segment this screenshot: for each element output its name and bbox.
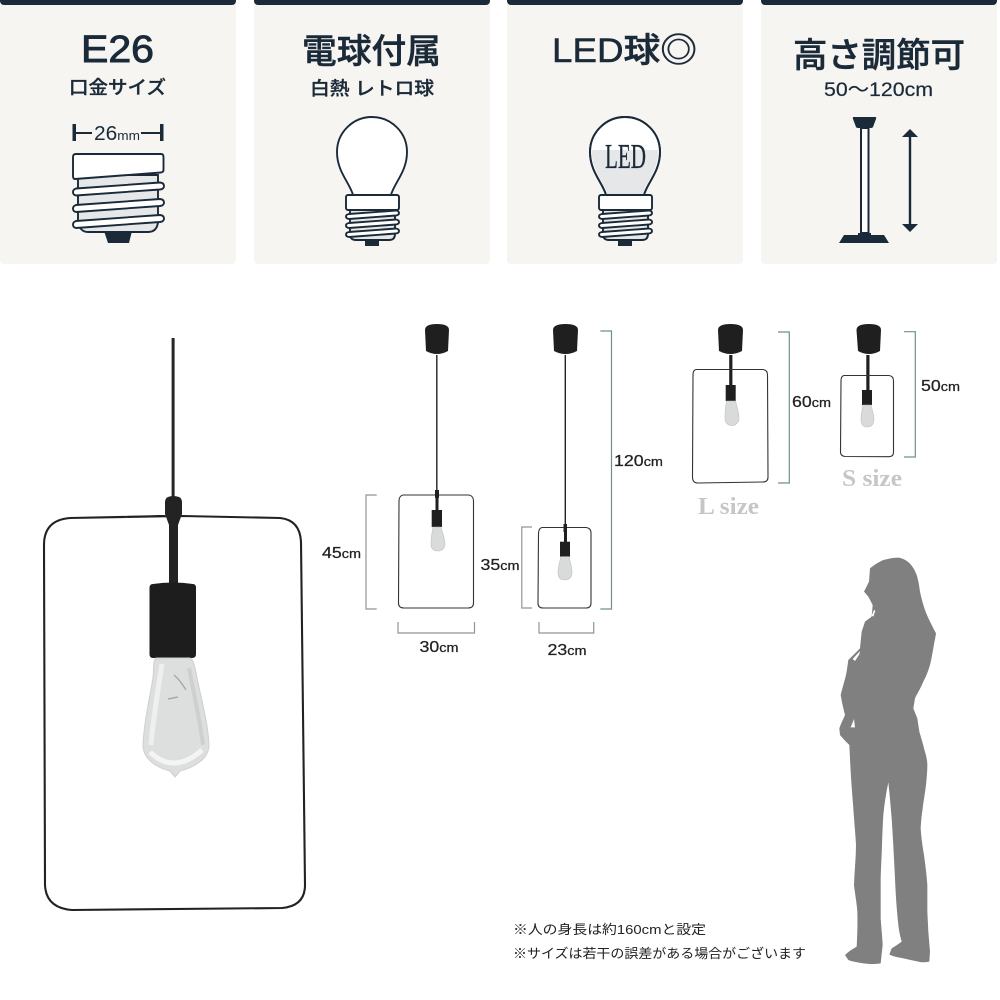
human silhouette <box>839 558 936 964</box>
dimension: 23cm: 23cm <box>548 642 586 659</box>
icon: pendant height <box>839 117 889 243</box>
panel: bulb included <box>254 0 490 264</box>
lamp socket <box>150 496 196 658</box>
dimension: 60cm: 60cm <box>792 394 831 411</box>
icon: E26 socket base <box>73 154 164 243</box>
icon: incandescent bulb <box>337 117 407 246</box>
heading: E26: E26 <box>81 29 154 71</box>
L size lamp <box>692 324 768 483</box>
dimension: 120cm: 120cm <box>614 453 663 470</box>
dimension: 60cm <box>778 332 831 483</box>
icon: 26mm dimension: 26mm <box>94 123 140 145</box>
frame <box>538 528 591 608</box>
arrow: height range <box>902 129 918 232</box>
dimension: 45cm <box>322 495 377 609</box>
icon: LED bulb: LED <box>605 137 646 176</box>
dimension: 50cm <box>904 332 960 457</box>
dimension: 30cm: 30cm <box>420 639 458 656</box>
bulb <box>725 401 739 426</box>
dimension: 23cm <box>539 622 594 659</box>
heading: LED compatible: LED球◎ <box>552 32 697 70</box>
frame <box>398 495 474 608</box>
icon: 26mm dimension <box>72 123 164 145</box>
dimension: 35cm: 35cm <box>480 557 520 574</box>
S size lamp <box>840 324 894 457</box>
label: L size: L size <box>698 494 759 520</box>
lamp bulb <box>143 658 209 777</box>
note: assumed height: ※人の身長は約160cmと設定 <box>513 922 706 937</box>
heading: bulb included: 電球付属 <box>302 33 441 71</box>
dimension: 50cm: 50cm <box>921 378 960 395</box>
dimension: 30cm <box>398 622 474 656</box>
bulb <box>431 527 445 551</box>
frame <box>840 376 894 457</box>
dimension: 35cm <box>480 527 532 608</box>
subheading: height range: 50〜120cm <box>824 79 933 101</box>
heading: adjustable height: 高さ調節可 <box>793 37 965 75</box>
subheading: incandescent retro bulb: 白熱 レトロ球 <box>310 78 435 99</box>
pendant lamp S dimension drawing <box>538 324 591 608</box>
panel: LED compatible <box>507 0 743 264</box>
icon: LED bulb <box>590 117 660 246</box>
dimension: 120cm <box>600 331 663 609</box>
lamp frame <box>44 516 305 910</box>
bulb <box>861 405 874 427</box>
dimension: 45cm: 45cm <box>322 545 361 562</box>
panel: adjustable height <box>761 0 997 264</box>
subheading: base size: 口金サイズ <box>69 77 166 98</box>
label: S size: S size <box>842 466 902 492</box>
frame <box>692 370 768 483</box>
bulb <box>558 557 572 580</box>
pendant lamp L dimension drawing <box>398 324 474 608</box>
main pendant lamp photo <box>44 338 305 910</box>
panel: E26 base size <box>0 0 236 264</box>
note: size tolerance: ※サイズは若干の誤差がある場合がございます <box>513 945 806 961</box>
